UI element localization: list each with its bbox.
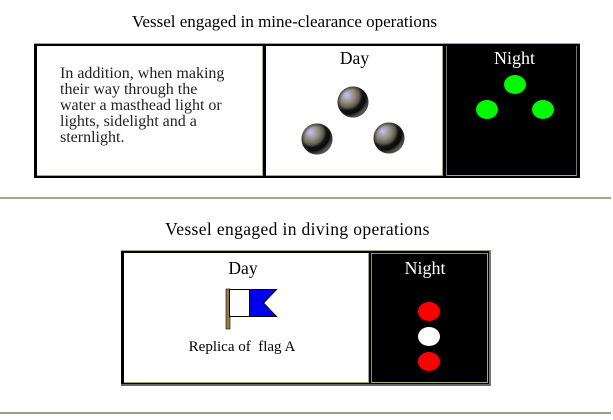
heading: night: Night	[404, 258, 446, 278]
divider line 1	[0, 197, 611, 199]
icon: green light left	[476, 100, 498, 119]
icon: flag A	[226, 289, 276, 329]
heading: day: Day	[340, 48, 369, 68]
icon: green light right	[532, 100, 554, 119]
text: description: sternlight.	[60, 129, 124, 146]
panel: day	[266, 46, 443, 176]
icon: day ball left	[302, 124, 332, 154]
text: description: lights, sidelight and a	[60, 113, 197, 130]
icon: green light top	[504, 75, 526, 94]
text: description	[60, 65, 224, 146]
heading: day: Day	[228, 258, 258, 278]
panel: diving table	[121, 250, 491, 386]
panel: mine-clearance table	[34, 43, 580, 178]
icon: day ball right	[374, 122, 404, 154]
panel: night	[446, 46, 577, 176]
icon: white light	[418, 327, 440, 346]
title: mine-clearance: Vessel engaged in mine-clearance operations	[132, 12, 437, 31]
heading: night: Night	[494, 48, 535, 68]
icon: day ball top	[338, 86, 368, 118]
icon: red light bottom	[418, 352, 440, 371]
panel: day	[124, 253, 369, 383]
icon: red light top	[418, 302, 440, 321]
divider line 2	[0, 412, 611, 414]
panel: night	[371, 253, 488, 383]
text: description: their way through the	[60, 81, 197, 98]
text: flag caption: Replica of flag A	[189, 339, 295, 355]
text: description: In addition, when making	[60, 65, 224, 82]
title: diving: Vessel engaged in diving operations	[165, 219, 430, 239]
panel: description text	[37, 46, 263, 176]
text: description: water a masthead light or	[60, 97, 222, 114]
